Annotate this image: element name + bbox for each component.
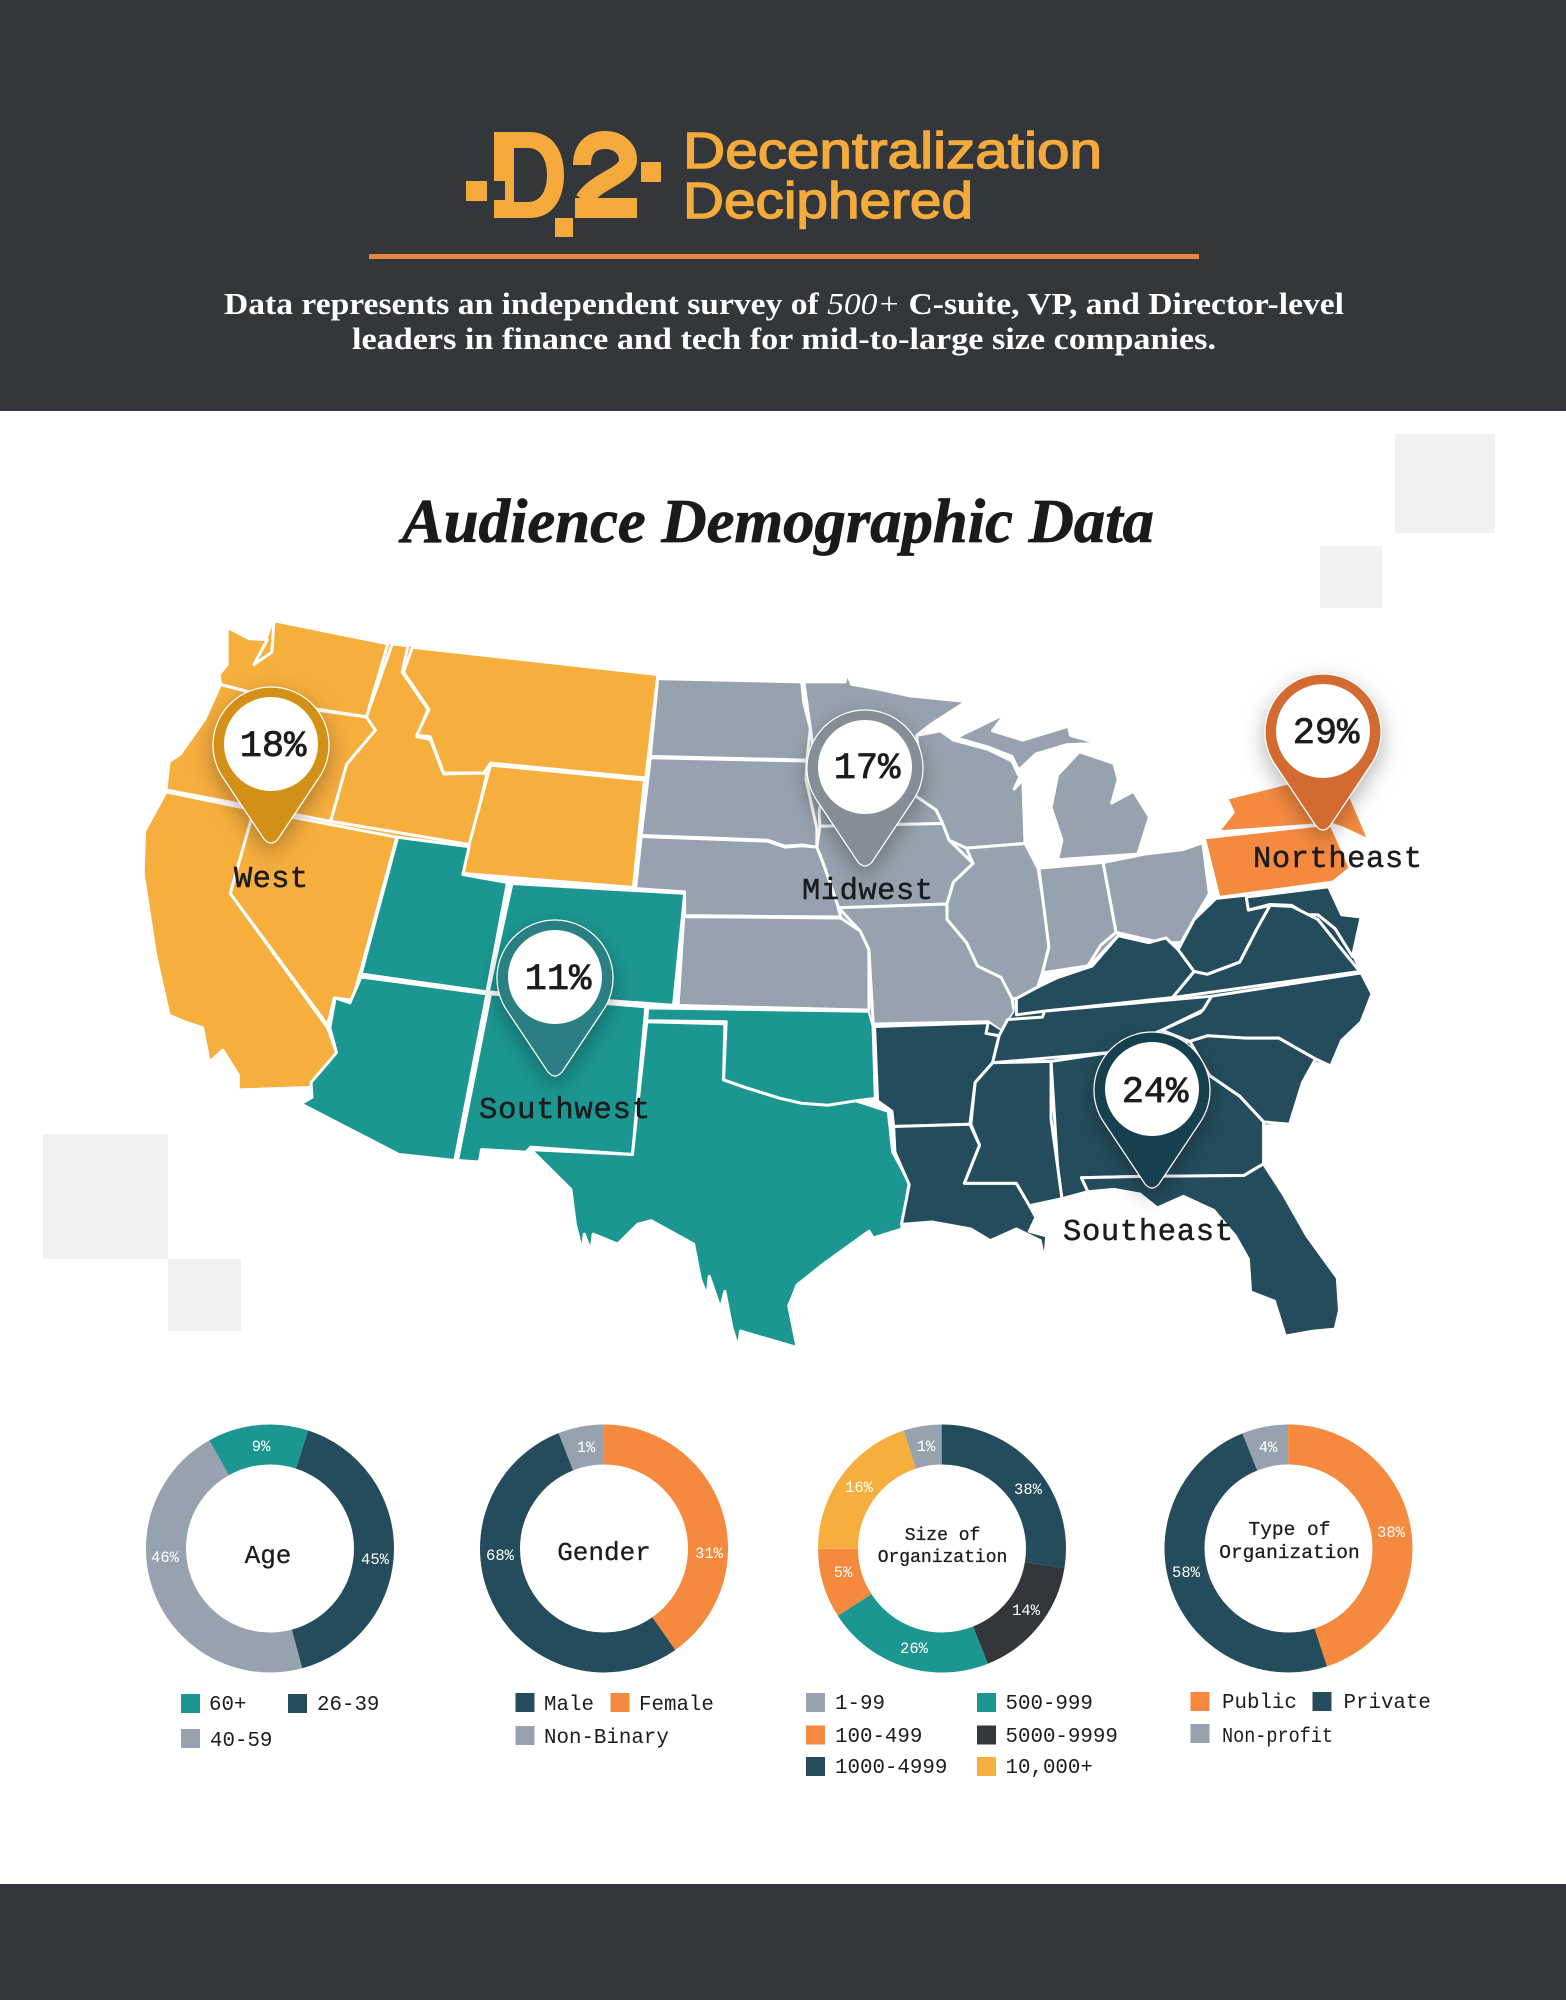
legend: Size of Organization: 1000-4999	[835, 1757, 947, 1780]
pin: Midwest 17%	[807, 710, 923, 866]
pin: Northeast 29%: 29%	[1293, 713, 1360, 755]
donut chart: Size of Organization: 26%	[900, 1640, 929, 1658]
footer band	[0, 1884, 1566, 2000]
legend: Type of Organization	[1190, 1692, 1431, 1749]
region label: Southwest: Southwest	[479, 1094, 650, 1128]
map of the United States	[143, 621, 1372, 1349]
donut chart: Gender: 68%	[486, 1547, 515, 1565]
donut chart: Size of Organization: Organization	[878, 1548, 1007, 1568]
legend: Size of Organization: 100-499	[835, 1726, 922, 1749]
donut chart: Gender: 31%	[695, 1545, 724, 1563]
legend: Size of Organization: 1-99	[835, 1693, 885, 1716]
donut chart: Age	[151, 1438, 390, 1652]
donut chart: Size of Organization: Size of	[905, 1526, 980, 1546]
survey description	[224, 286, 1344, 356]
region: West	[143, 621, 658, 1090]
logo wordmark: Decentralization	[683, 122, 1102, 179]
donut chart: Size of Organization: 14%	[1012, 1602, 1041, 1620]
donut chart: Size of Organization: 5%	[834, 1564, 853, 1582]
legend: Type of Organization: Public	[1222, 1692, 1297, 1715]
donut chart: Size of Organization: 38%	[1014, 1481, 1043, 1499]
legend: Size of Organization: 5000-9999	[1006, 1726, 1118, 1749]
donut chart: Size of Organization	[834, 1438, 1046, 1658]
pin: Southeast 24%	[1094, 1032, 1210, 1188]
pin: Southwest 11%: 11%	[525, 959, 592, 1001]
logo: D2 mark	[466, 132, 661, 237]
legend: Gender: Female	[639, 1694, 714, 1717]
donut chart: Gender: 1%	[577, 1439, 596, 1457]
donut chart: Type of Organization: 58%	[1172, 1564, 1201, 1582]
region label: West: West	[234, 863, 308, 897]
survey description: leaders in finance and tech for mid-to-large size companies.	[352, 321, 1216, 356]
legend: Size of Organization: 10,000+	[1006, 1757, 1093, 1780]
region: Southwest	[301, 837, 909, 1349]
logo wordmark: Deciphered	[683, 172, 973, 229]
header band	[0, 0, 1566, 411]
pin: Southeast 24%: 24%	[1122, 1072, 1189, 1114]
donut chart: Type of Organization	[1172, 1439, 1406, 1652]
region: Midwest	[636, 673, 1209, 1031]
legend: Size of Organization	[806, 1693, 1118, 1780]
logo wordmark	[683, 122, 1102, 229]
donut chart: Age: 9%	[252, 1438, 271, 1456]
donut chart: Gender	[486, 1439, 724, 1652]
legend: Gender: Non-Binary	[544, 1727, 669, 1750]
legend: Gender: Male	[544, 1694, 594, 1717]
donut chart: Age: 45%	[361, 1551, 390, 1569]
region label: Northeast: Northeast	[1253, 843, 1422, 877]
pin: West 18%	[213, 687, 329, 843]
region label: Southeast: Southeast	[1063, 1216, 1233, 1250]
donut chart: Size of Organization: 1%	[917, 1438, 936, 1456]
legend: Age: 40-59	[210, 1730, 272, 1753]
survey description: Data represents an independent survey of 500+ C-suite, VP, and Director-level	[224, 286, 1344, 321]
pin: Midwest 17%: 17%	[834, 748, 901, 790]
legend: Type of Organization: Private	[1344, 1692, 1431, 1715]
pin: Southwest 11%	[497, 920, 613, 1076]
legend: Age	[181, 1694, 379, 1753]
donut chart: Size of Organization: 16%	[845, 1479, 874, 1497]
legend: Type of Organization: Non-profit	[1222, 1726, 1333, 1749]
region: Northeast	[1204, 777, 1369, 897]
donut chart: Type of Organization: Organization	[1219, 1542, 1360, 1564]
pin: Northeast 29%	[1265, 674, 1381, 830]
donut chart: Age: Age	[245, 1541, 291, 1571]
donut chart: Type of Organization: 38%	[1377, 1524, 1406, 1542]
pin: West 18%: 18%	[240, 726, 307, 768]
title: Audience Demographic Data	[398, 488, 1154, 556]
legend: Gender	[516, 1693, 714, 1750]
donut chart: Age: 46%	[151, 1549, 180, 1567]
decorative squares	[43, 434, 1495, 1331]
donut chart: Type of Organization: 4%	[1259, 1439, 1278, 1457]
donut chart: Gender: Gender	[557, 1538, 651, 1568]
donut chart: Type of Organization: Type of	[1249, 1519, 1330, 1541]
region label: Midwest: Midwest	[802, 875, 933, 909]
region: Southeast	[875, 887, 1372, 1336]
legend: Age: 60+	[209, 1694, 246, 1717]
legend: Age: 26-39	[317, 1694, 379, 1717]
legend: Size of Organization: 500-999	[1006, 1693, 1093, 1716]
header rule	[369, 254, 1199, 259]
